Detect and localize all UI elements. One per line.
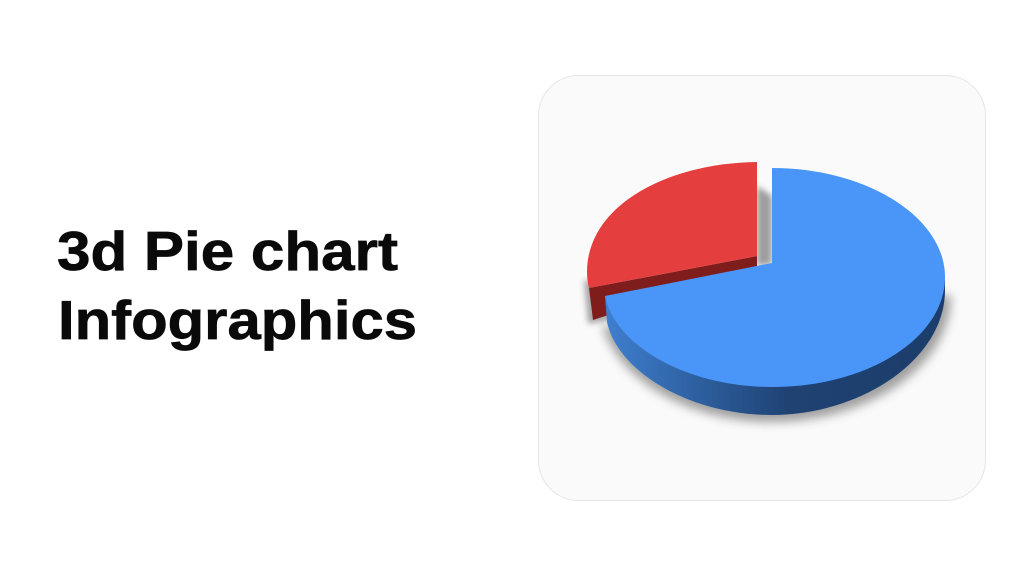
- panel: chart card: [538, 76, 986, 500]
- blue slice side: [605, 280, 945, 415]
- title: Infographics: [58, 289, 417, 351]
- blue slice top: [605, 168, 945, 387]
- red slice top: [587, 162, 757, 288]
- chart: 3D pie: [584, 162, 951, 422]
- shadow in gap between slices: [757, 186, 772, 266]
- red slice side: [589, 256, 757, 320]
- title: [57, 220, 417, 351]
- title: 3d Pie chart: [57, 220, 398, 282]
- shadow of pie: [602, 295, 951, 422]
- shadow of red slice: [584, 280, 620, 324]
